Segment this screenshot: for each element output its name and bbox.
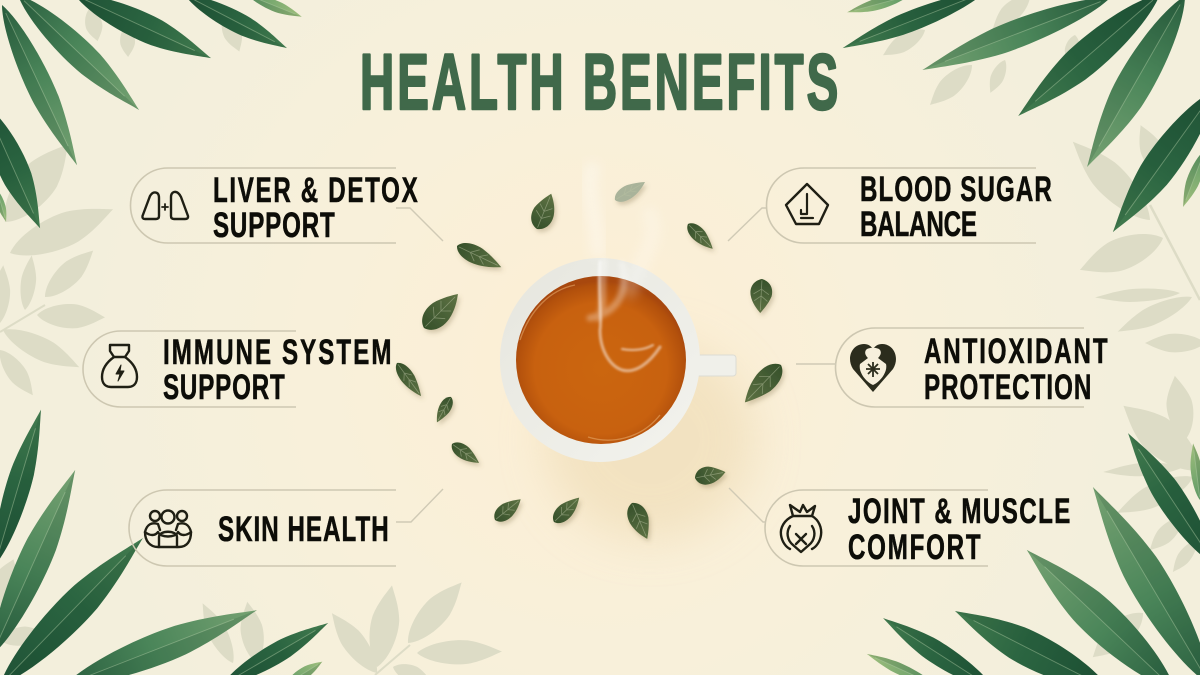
connector [396,489,443,522]
tea highlights [520,285,660,440]
pill outline [765,490,988,566]
icon: pentagon gauge [786,184,828,224]
icon: heart with shield [850,344,896,392]
label: PROTECTION [924,369,1091,407]
steam over the cup [590,170,660,371]
label [213,172,418,245]
label: COMFORT [848,529,981,567]
label: JOINT & MUSCLE [848,493,1070,531]
benefit: liver and detox support [130,168,443,245]
benefit: blood sugar balance [728,168,1052,244]
connector [729,488,765,522]
label: LIVER & DETOX [213,172,418,210]
label: SUPPORT [213,207,335,245]
label [924,333,1108,407]
shadow foliage: bottom [0,555,502,675]
shadow foliage: right [879,0,1200,667]
label: SUPPORT [163,369,285,407]
pill outline [83,331,296,407]
benefit: joint and muscle comfort [729,488,1070,567]
cup shadow glow [545,340,755,540]
big leaves: top right [839,0,1200,242]
connector [728,208,766,241]
tea cup [500,170,736,462]
icon: fruit with joint [781,505,821,552]
icon: group of people [145,510,191,547]
label: ANTIOXIDANT [924,333,1108,371]
title: HEALTH BENEFITS [360,37,838,126]
label [848,493,1070,567]
label [163,334,391,407]
shadow foliage: left and top left [0,6,248,401]
pill outline [836,328,1084,407]
label: IMMUNE SYSTEM [163,334,391,372]
cup handle [692,355,736,376]
label [860,171,1052,244]
connector [796,363,836,365]
benefit: immune system support [83,331,391,407]
big leaves: bottom right [864,425,1200,675]
big leaves: top left [0,0,304,234]
label: BALANCE [860,206,977,244]
scattered tea leaves [391,176,789,543]
pill outline [766,168,1036,243]
big leaves: bottom left [0,406,333,675]
icon: pouch with bolt [102,345,137,387]
label: BLOOD SUGAR [860,171,1052,209]
pill outline [130,168,396,243]
benefit: skin health [129,489,443,566]
benefit: antioxidant protection [796,328,1108,407]
icon: lungs [142,192,188,219]
cup body [500,258,700,462]
label: SKIN HEALTH [218,511,389,549]
connector [396,208,443,241]
tea surface [516,276,686,444]
pill outline [129,490,396,566]
